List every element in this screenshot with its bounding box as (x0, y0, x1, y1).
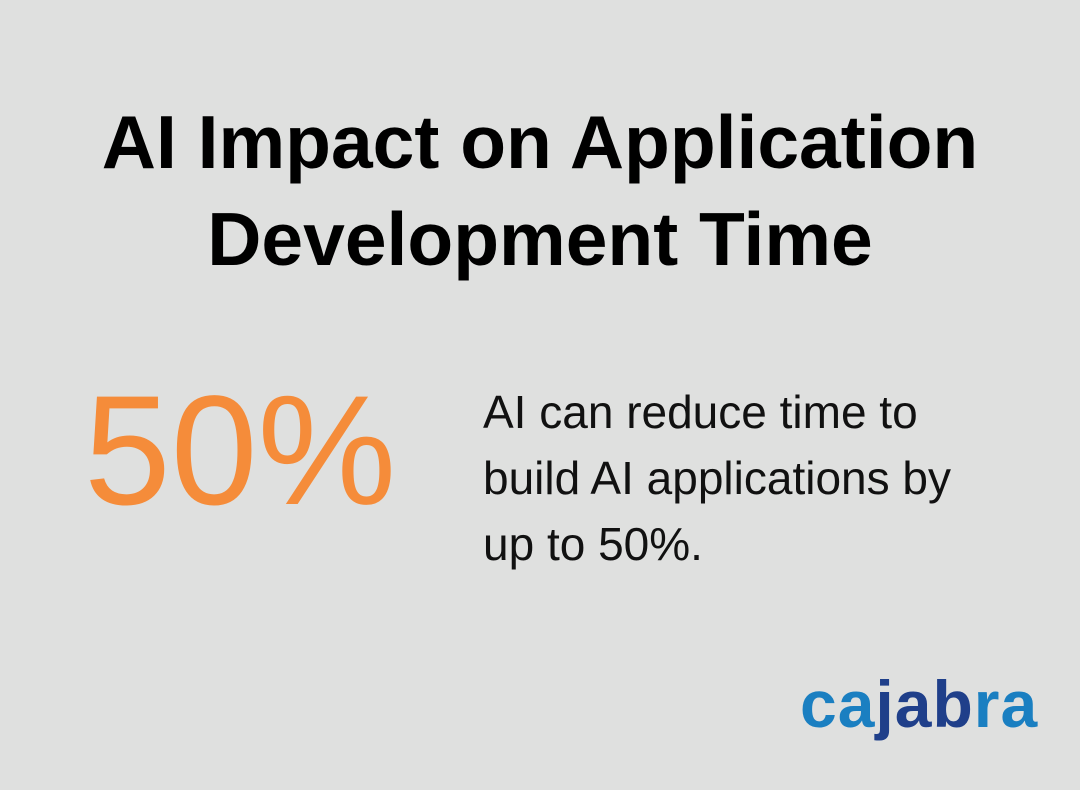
description text: AI can reduce time to build AI applications by up to 50%. (483, 386, 951, 570)
title: AI Impact on Application (102, 100, 978, 184)
logo: cajabra: cajabra (800, 667, 1038, 741)
big statistic: 50% (84, 364, 396, 538)
title: Development Time (207, 197, 873, 281)
title (102, 100, 978, 281)
